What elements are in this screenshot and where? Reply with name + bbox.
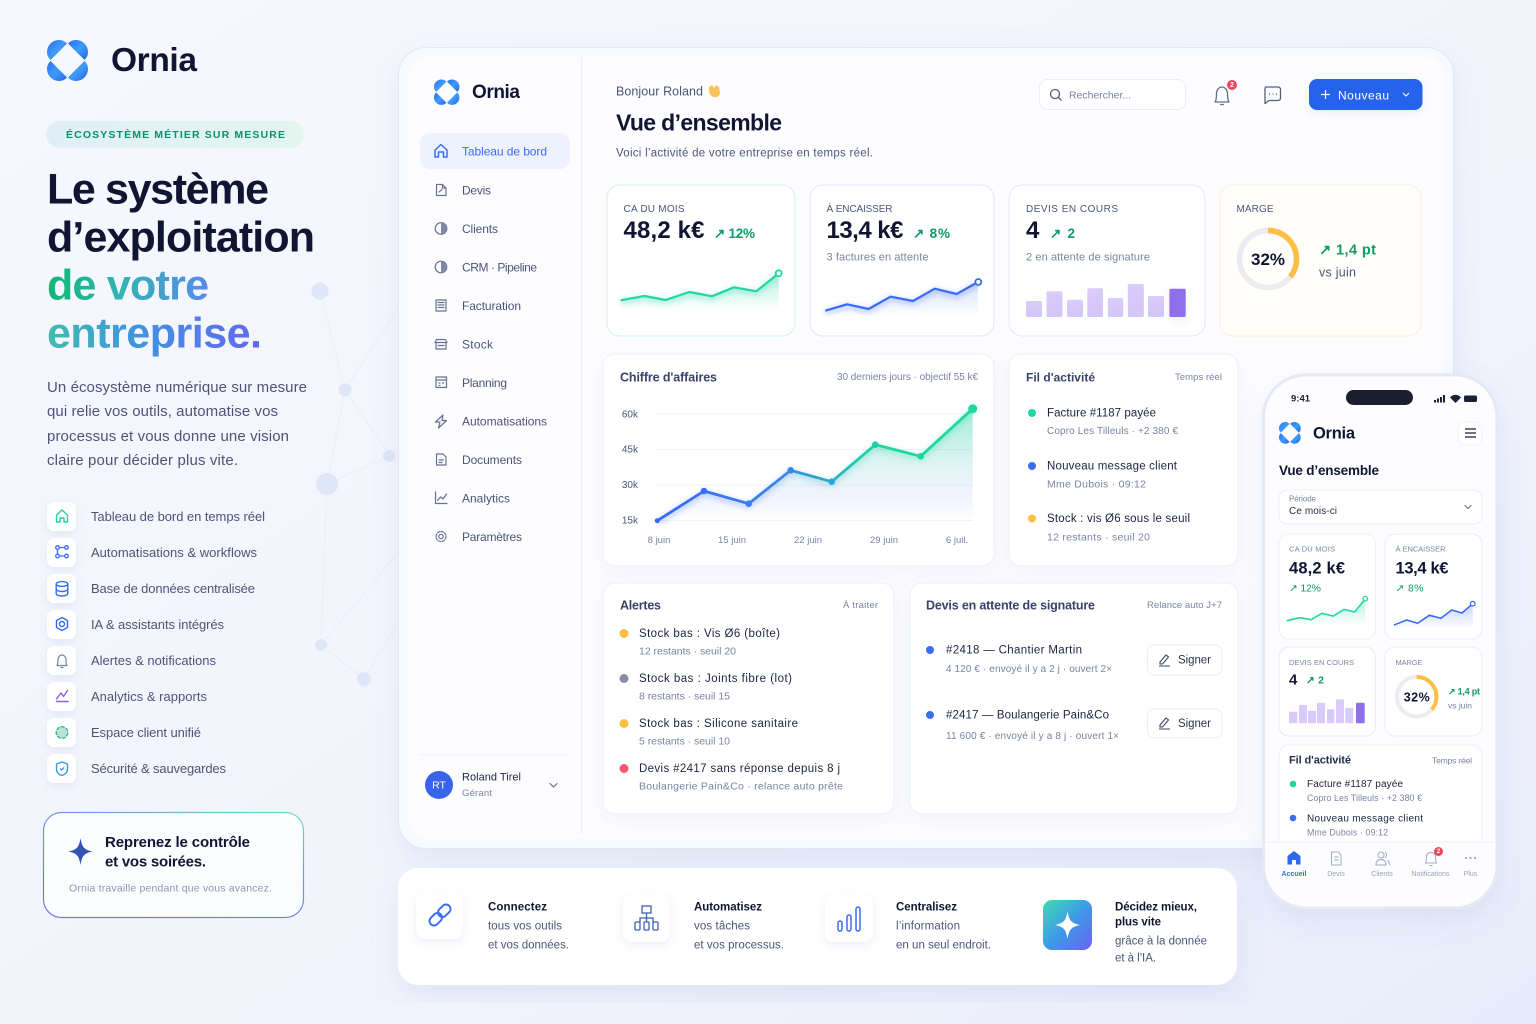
feed item: Stock : vis Ø6 sous le seuil	[1047, 513, 1190, 525]
main headline: de votre	[47, 262, 209, 310]
button: signer	[1148, 709, 1222, 738]
signature card: Relance auto J+7	[1147, 600, 1222, 611]
kpi card: CA du mois	[607, 185, 795, 336]
chart card: chiffre d'affaires: 30 derniers jours · objectif 55 k€	[837, 372, 978, 383]
kpi card: devis en cours: 4	[1026, 217, 1040, 244]
value: décidez: Décidez mieux,	[1115, 902, 1197, 914]
feature: analytics: Analytics & rapports	[91, 689, 208, 704]
kpi card: devis en cours: DEVIS EN COURS	[1026, 204, 1118, 215]
phone activity feed	[1279, 745, 1482, 865]
callout: reprenez le contrôle: Ornia travaille pendant que vous avancez.	[69, 883, 272, 895]
tab: devis	[1327, 852, 1345, 878]
alerts card: Alertes	[620, 599, 661, 613]
nav: Analytics	[436, 492, 510, 506]
feature: espace client: Espace client unifié	[91, 725, 201, 740]
feed item	[1028, 461, 1178, 491]
kpi card: à encaisser	[810, 185, 994, 336]
feed item: Copro Les Tilleuls · +2 380 €	[1047, 426, 1178, 437]
feature: alertes	[47, 646, 216, 675]
button: signer: Signer	[1178, 655, 1211, 667]
quote item	[926, 645, 1112, 675]
phone activity feed: Copro Les Tilleuls · +2 380 €	[1307, 793, 1422, 803]
page header: Voici l’activité de votre entreprise en temps réel.	[616, 148, 873, 160]
feature: IA	[47, 610, 224, 639]
phone brand: Ornia	[1313, 425, 1356, 443]
button: nouveau: Nouveau	[1338, 89, 1389, 103]
button: nouveau	[1309, 79, 1422, 110]
feature: tableau de bord	[47, 502, 265, 531]
nav: Clients: Clients	[462, 222, 498, 236]
icon: notifications bell: 2	[1230, 82, 1234, 89]
alert item: Boulangerie Pain&Co · relance auto prête	[639, 781, 843, 793]
tab: accueil: Accueil	[1282, 871, 1307, 878]
nav: CRM: CRM · Pipeline	[462, 261, 537, 275]
feature: analytics	[47, 682, 208, 711]
line chart	[655, 404, 977, 523]
value: connectez: et vos données.	[488, 940, 569, 952]
quote item: 11 600 € · envoyé il y a 8 j · ouvert 1×	[946, 731, 1119, 742]
alert item	[620, 673, 792, 703]
value: connectez: tous vos outils	[488, 921, 562, 933]
period selector	[1279, 490, 1482, 524]
y axis: 30k	[622, 480, 639, 491]
x axis: 8 juin	[648, 535, 670, 546]
feature list	[47, 502, 265, 783]
main headline: d’exploitation	[47, 214, 315, 262]
value: automatisez	[623, 895, 784, 952]
signature card: Devis en attente de signature	[926, 599, 1095, 613]
alert item: Stock bas : Joints fibre (lot)	[639, 673, 792, 685]
alert item: 8 restants · seuil 15	[639, 691, 730, 703]
phone kpi: marge: ↗ 1,4 pt	[1448, 687, 1480, 697]
page header	[616, 85, 873, 160]
intro paragraph: processus et vous donne une vision	[47, 428, 289, 445]
alert item: Stock bas : Silicone sanitaire	[639, 718, 798, 730]
phone activity feed: Nouveau message client	[1307, 814, 1423, 825]
donut chart	[1240, 230, 1296, 288]
tab: notifications: 2	[1437, 849, 1441, 855]
tab: clients: Clients	[1371, 871, 1393, 878]
nav: Facturation: Facturation	[462, 299, 521, 313]
brand name: Ornia	[111, 42, 197, 79]
value: automatisez: Automatisez	[694, 902, 762, 914]
activity feed: Temps réel	[1175, 372, 1222, 383]
value: connectez	[416, 893, 569, 952]
decorative network	[312, 282, 400, 686]
button: signer	[1148, 645, 1222, 675]
feed item	[1028, 408, 1178, 437]
feature: automatisations	[47, 538, 258, 567]
eyebrow pill: ÉCOSYSTÈME MÉTIER SUR MESURE	[66, 128, 285, 141]
feed item: Mme Dubois · 09:12	[1047, 479, 1146, 491]
tab: accueil	[1282, 851, 1307, 878]
value: automatisez: et vos processus.	[694, 940, 784, 952]
page header: Vue d’ensemble	[616, 110, 782, 136]
alert item: 5 restants · seuil 10	[639, 736, 730, 748]
callout: reprenez le contrôle: et vos soirées.	[105, 854, 206, 871]
alerts card: À traiter	[843, 600, 878, 611]
status bar	[1291, 390, 1477, 405]
phone kpi: devis: 4	[1289, 672, 1298, 689]
quote item	[926, 710, 1119, 742]
nav: Devis	[436, 184, 491, 198]
user profile: RT	[432, 780, 446, 792]
period selector: Période	[1289, 495, 1317, 504]
nav: Automatisations: Automatisations	[462, 415, 547, 429]
nav: Stock	[435, 338, 494, 352]
kpi card: à encaisser: 3 factures en attente	[826, 252, 928, 264]
nav: Clients	[435, 222, 498, 236]
intro paragraph: claire pour décider plus vite.	[47, 452, 238, 469]
kpi card: CA du mois: 48,2 k€	[624, 217, 704, 244]
nav: Planning	[436, 376, 507, 390]
sparkline	[621, 270, 782, 310]
feed item: 12 restants · seuil 20	[1047, 532, 1150, 544]
nav active item	[420, 133, 570, 169]
phone kpi: à encaisser: À ENCAISSER	[1396, 545, 1446, 554]
y axis: 45k	[622, 445, 639, 456]
search box: Rechercher...	[1069, 90, 1131, 102]
brand logo	[47, 40, 88, 81]
value: connectez: Connectez	[488, 902, 547, 914]
phone kpi: marge	[1385, 647, 1482, 736]
kpi card: à encaisser: À ENCAISSER	[826, 202, 892, 215]
value: centralisez: en un seul endroit.	[896, 940, 991, 952]
alert item	[620, 628, 780, 658]
y axis: 15k	[622, 516, 639, 527]
main headline	[47, 166, 315, 358]
phone kpi: à encaisser: ↗ 8%	[1396, 583, 1424, 595]
tab: clients	[1371, 852, 1393, 878]
kpi card: devis en cours: 2 en attente de signature	[1026, 252, 1150, 264]
button: signer: Signer	[1178, 718, 1211, 730]
alert item	[620, 718, 798, 748]
feed item: Facture #1187 payée	[1047, 408, 1156, 420]
phone kpi: marge: 32%	[1404, 691, 1430, 705]
value: centralisez: l’information	[896, 921, 960, 933]
kpi card: marge: MARGE	[1236, 204, 1274, 215]
y axis	[622, 410, 639, 527]
kpi card: marge: vs juin	[1319, 266, 1356, 280]
main headline: Le système	[47, 166, 269, 214]
y axis: 60k	[622, 410, 639, 421]
activity feed	[1009, 354, 1238, 566]
feed item: Nouveau message client	[1047, 461, 1178, 473]
sidebar logo	[434, 80, 459, 105]
phone kpi: devis: ↗ 2	[1306, 675, 1324, 687]
intro paragraph: Un écosystème numérique sur mesure	[47, 379, 307, 396]
feature: base de données: Base de données centralisée	[91, 581, 255, 596]
kpi card: marge	[1220, 185, 1421, 336]
tab: devis: Devis	[1327, 871, 1345, 878]
nav: Facturation	[436, 299, 521, 313]
phone kpi: marge: vs juin	[1448, 701, 1472, 711]
main headline: entreprise.	[47, 310, 262, 358]
kpi card: devis en cours: ↗ 2	[1050, 226, 1075, 241]
feature: espace client	[47, 718, 201, 747]
feature: alertes: Alertes & notifications	[91, 653, 216, 668]
icon: menu	[1458, 422, 1482, 445]
phone kpi: CA du mois: 48,2 k€	[1289, 560, 1345, 578]
phone kpi: devis: DEVIS EN COURS	[1289, 658, 1354, 667]
icon: messages	[1265, 87, 1280, 104]
bottom value strip	[398, 868, 1237, 985]
nav: Paramètres	[436, 530, 522, 544]
phone kpi: CA du mois	[1279, 534, 1376, 639]
feature: IA: IA & assistants intégrés	[91, 617, 224, 632]
feature: sécurité	[47, 754, 226, 783]
value: centralisez	[825, 895, 991, 952]
value: automatisez: vos tâches	[694, 921, 750, 933]
nav: Devis: Devis	[462, 184, 491, 198]
value: décidez: plus vite	[1115, 917, 1161, 929]
tab: notifications: Notifications	[1411, 871, 1450, 878]
page header: Bonjour Roland	[616, 85, 703, 99]
nav active item: Tableau de bord	[462, 145, 547, 159]
tab: plus	[1464, 857, 1478, 878]
phone activity feed: Mme Dubois · 09:12	[1307, 828, 1388, 838]
kpi card: devis en cours	[1009, 185, 1205, 336]
bar chart	[1026, 284, 1186, 317]
phone brand	[1279, 422, 1356, 444]
activity feed: Fil d'activité	[1026, 371, 1095, 385]
user profile	[425, 771, 557, 799]
nav: Paramètres: Paramètres	[462, 530, 522, 544]
eyebrow pill	[46, 121, 304, 148]
phone kpi: marge: MARGE	[1396, 658, 1422, 667]
value: décidez: grâce à la donnée	[1115, 936, 1207, 948]
search box	[1040, 80, 1186, 110]
kpi card: marge: ↗ 1,4 pt	[1319, 243, 1376, 259]
user profile: Roland Tirel	[462, 772, 521, 784]
alert item: Stock bas : Vis Ø6 (boîte)	[639, 628, 780, 640]
intro paragraph: qui relie vos outils, automatise vos	[47, 403, 278, 420]
kpi card: à encaisser: ↗ 8%	[913, 226, 950, 241]
nav: Planning: Planning	[462, 376, 507, 390]
icon: waving hand	[709, 85, 720, 97]
phone kpi: CA du mois: CA DU MOIS	[1289, 545, 1335, 554]
feature: tableau de bord: Tableau de bord en temps réel	[91, 509, 265, 524]
sparkline	[825, 279, 981, 316]
kpi card: à encaisser: 13,4 k€	[826, 217, 904, 244]
callout: reprenez le contrôle	[44, 812, 304, 918]
feed item	[1028, 513, 1190, 544]
alert item: Devis #2417 sans réponse depuis 8 j	[639, 763, 840, 775]
signature card	[910, 583, 1238, 814]
nav: Documents: Documents	[462, 453, 522, 467]
x axis	[648, 535, 968, 546]
donut chart: 32%	[1251, 250, 1285, 269]
phone activity feed: Facture #1187 payée	[1307, 779, 1403, 790]
chart card: chiffre d'affaires	[603, 354, 994, 566]
sidebar	[420, 80, 570, 799]
phone kpi: devis	[1279, 647, 1376, 736]
phone activity feed: Fil d'activité	[1289, 755, 1351, 767]
x axis: 15 juin	[718, 535, 746, 546]
quote item: #2418 — Chantier Martin	[946, 645, 1082, 657]
phone kpi: à encaisser	[1385, 534, 1482, 639]
period selector: Ce mois-ci	[1289, 506, 1337, 517]
alert item: 12 restants · seuil 20	[639, 646, 736, 658]
alert item	[620, 763, 843, 793]
quote item: 4 120 € · envoyé il y a 2 j · ouvert 2×	[946, 664, 1112, 675]
feature: sécurité: Sécurité & sauvegardes	[91, 761, 226, 776]
x axis: 29 juin	[870, 535, 898, 546]
alerts card	[603, 583, 894, 814]
value: centralisez: Centralisez	[896, 902, 957, 914]
user profile: Gérant	[462, 788, 492, 799]
x axis: 6 juil.	[946, 535, 968, 546]
feature: automatisations: Automatisations & workflows	[91, 545, 258, 560]
phone mockup	[1264, 375, 1499, 908]
phone kpi: à encaisser: 13,4 k€	[1396, 560, 1448, 578]
panel: dashboard window	[398, 48, 1454, 848]
chart card: chiffre d'affaires: Chiffre d'affaires	[620, 371, 717, 385]
phone title: Vue d’ensemble	[1279, 463, 1379, 478]
quote item: #2417 — Boulangerie Pain&Co	[946, 710, 1109, 722]
nav: Stock: Stock	[462, 338, 494, 352]
intro paragraph	[47, 379, 307, 469]
feature: base de données	[47, 574, 255, 603]
value: décidez	[1043, 900, 1207, 965]
kpi card: CA du mois: CA DU MOIS	[624, 204, 685, 215]
nav: Analytics: Analytics	[462, 492, 510, 506]
tab: plus: Plus	[1464, 871, 1478, 878]
phone tab bar	[1266, 842, 1494, 906]
callout: reprenez le contrôle: Reprenez le contrôle	[105, 834, 250, 851]
status bar: 9:41	[1291, 394, 1311, 405]
sidebar brand: Ornia	[472, 82, 520, 103]
phone kpi: CA du mois: ↗ 12%	[1289, 583, 1321, 595]
tab: notifications	[1411, 847, 1450, 878]
value: décidez: et à l’IA.	[1115, 953, 1156, 965]
kpi card: CA du mois: ↗ 12%	[714, 226, 755, 241]
x axis: 22 juin	[794, 535, 822, 546]
phone activity feed: Temps réel	[1432, 756, 1472, 766]
icon: notifications bell	[1215, 80, 1237, 104]
